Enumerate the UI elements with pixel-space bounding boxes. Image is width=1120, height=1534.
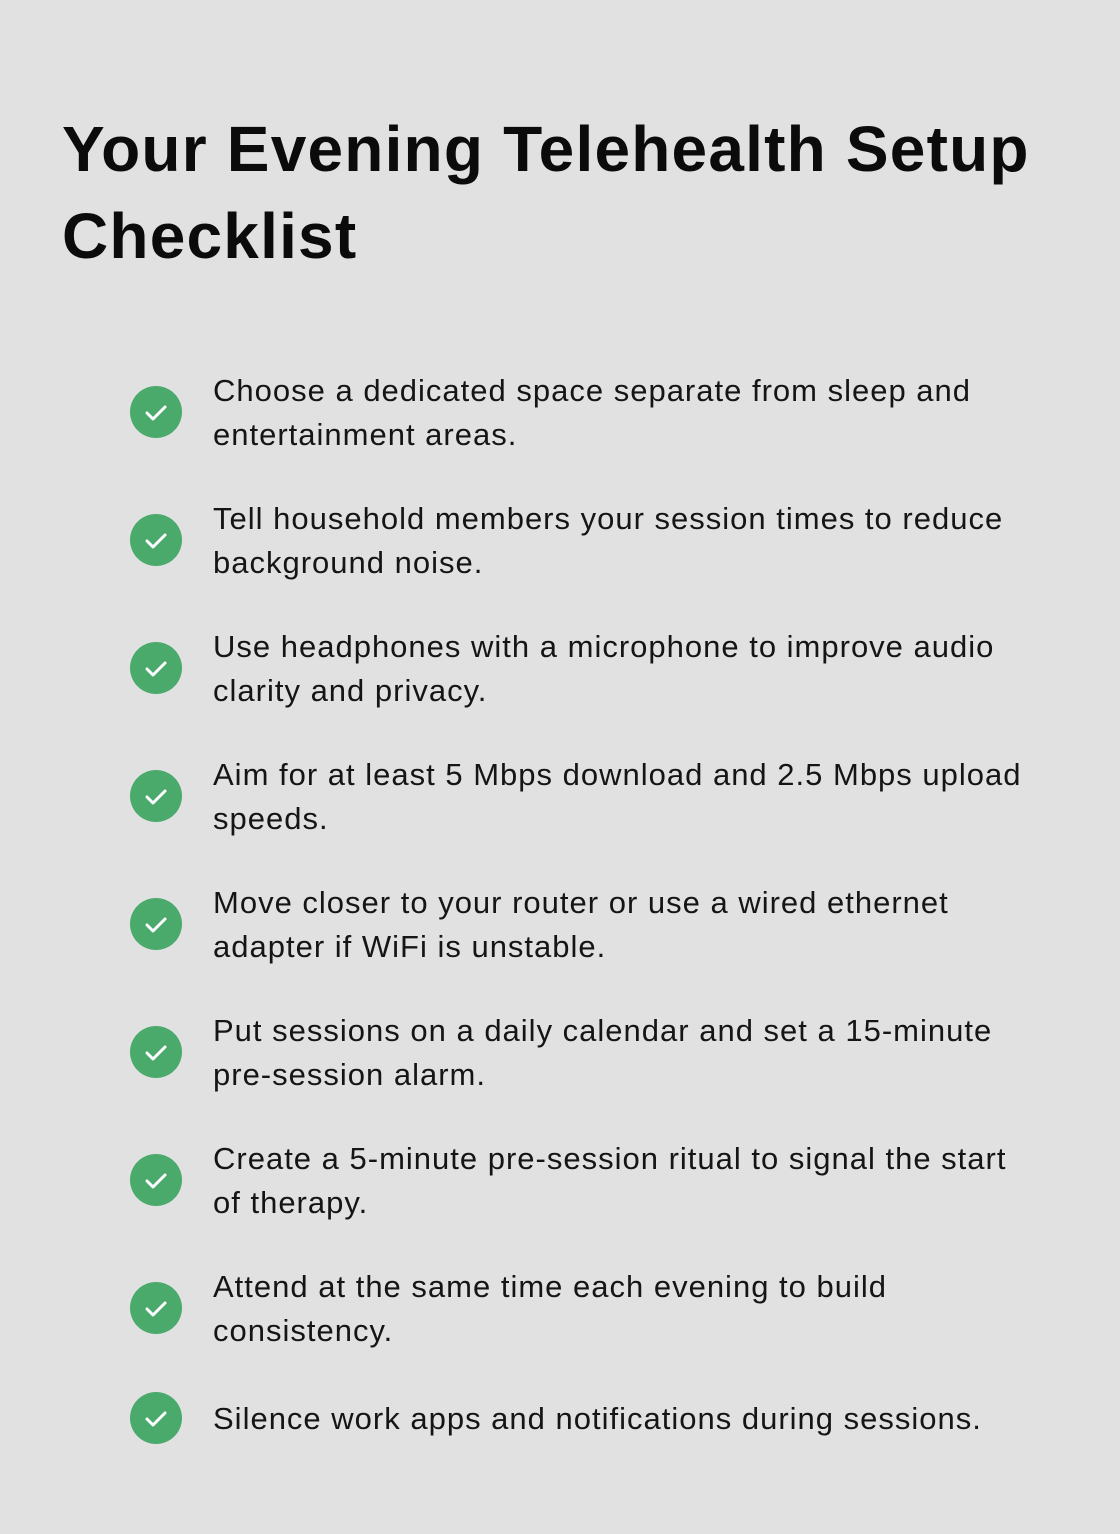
checklist [130, 373, 1022, 1444]
item 8: consistency. [213, 1313, 393, 1348]
item 7: Create a 5-minute pre-session ritual to signal the start [213, 1141, 1006, 1176]
item 8 [130, 1269, 887, 1348]
item 1 [130, 373, 971, 452]
item 5: Move closer to your router or use a wired ethernet [213, 885, 949, 920]
item 4: speeds. [213, 801, 329, 836]
item 7: of therapy. [213, 1185, 368, 1220]
item 6: Put sessions on a daily calendar and set a 15-minute [213, 1013, 992, 1048]
item 5: adapter if WiFi is unstable. [213, 929, 606, 964]
title [62, 113, 1030, 272]
item 1: entertainment areas. [213, 417, 517, 452]
item 9: Silence work apps and notifications during sessions. [213, 1401, 982, 1436]
item 3: clarity and privacy. [213, 673, 487, 708]
item 4: Aim for at least 5 Mbps download and 2.5 Mbps upload [213, 757, 1022, 792]
item 2: background noise. [213, 545, 483, 580]
item 6 [130, 1013, 992, 1092]
item 1: Choose a dedicated space separate from sleep and [213, 373, 971, 408]
item 7 [130, 1141, 1006, 1220]
item 3: Use headphones with a microphone to improve audio [213, 629, 994, 664]
item 2: Tell household members your session times to reduce [213, 501, 1003, 536]
item 5 [130, 885, 949, 964]
title: Your Evening Telehealth Setup [62, 113, 1030, 185]
item 8: Attend at the same time each evening to build [213, 1269, 887, 1304]
item 6: pre-session alarm. [213, 1057, 486, 1092]
item 3 [130, 629, 994, 708]
item 9 [130, 1392, 982, 1444]
item 4 [130, 757, 1022, 836]
item 2 [130, 501, 1003, 580]
title: Checklist [62, 200, 357, 272]
